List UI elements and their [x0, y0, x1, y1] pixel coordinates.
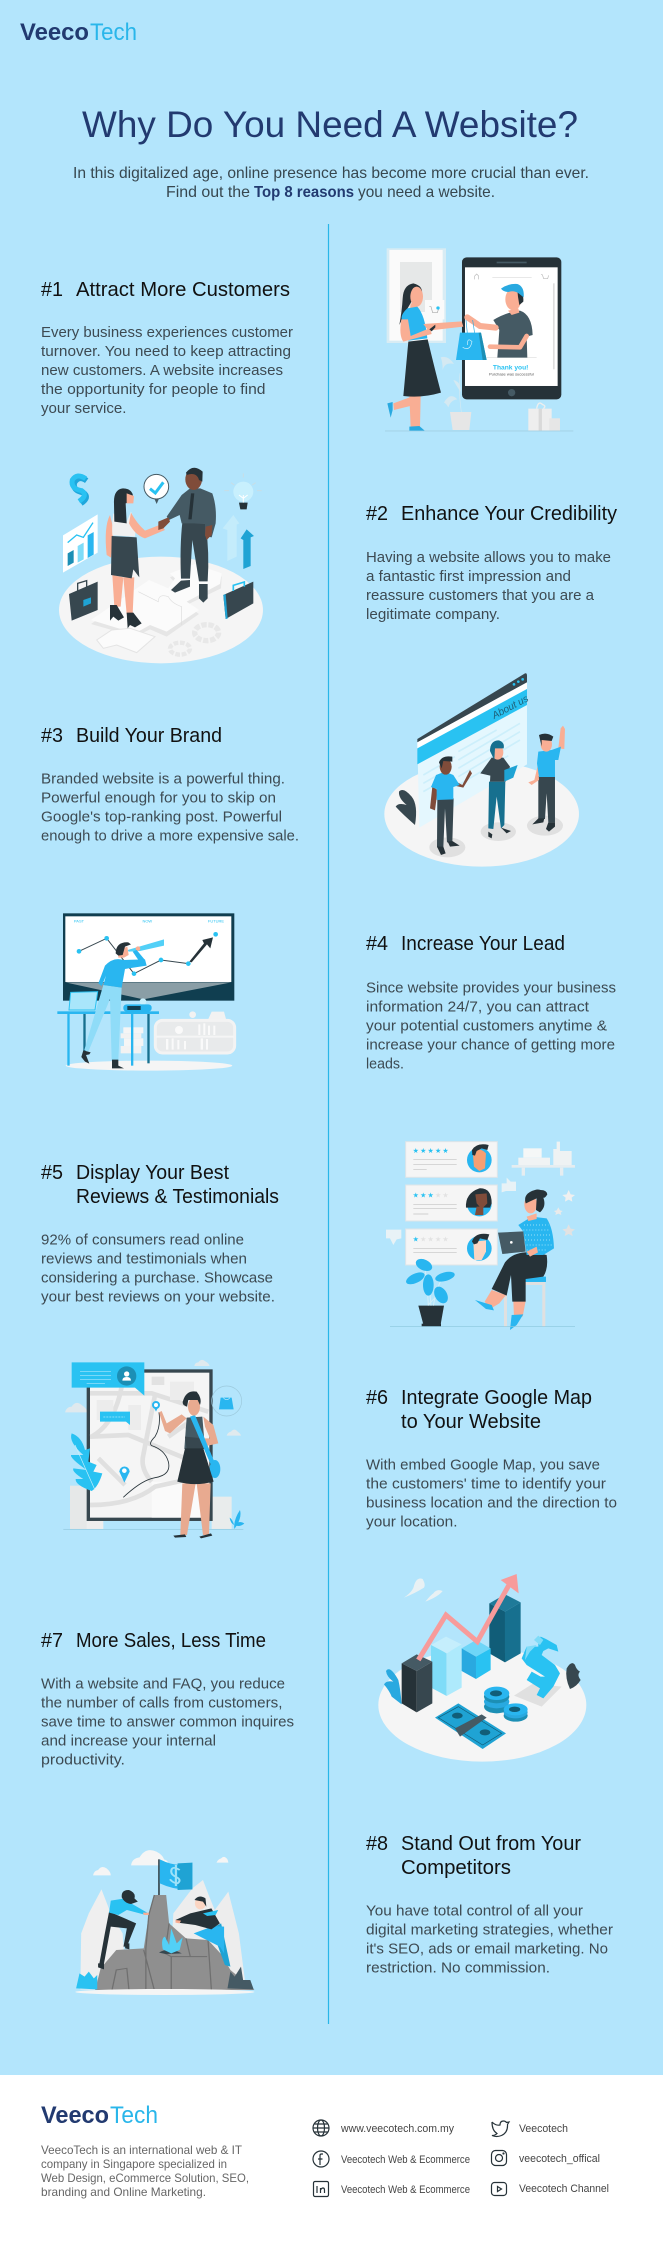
panel: reason 3 text: enough to drive a more expensive sale.: [41, 828, 299, 844]
panel: reason 8 text: it's SEO, ads or email marketing. No: [366, 1940, 608, 1958]
illustration 7: rising bar chart with money: [378, 1574, 586, 1762]
icon: instagram: [492, 2150, 506, 2166]
footer logo: [41, 2102, 158, 2129]
intro text: [73, 165, 589, 201]
panel: reason 7 text: save time to answer common inquires: [41, 1714, 294, 1730]
panel: reason 4 text: information 24/7, you can attract: [366, 998, 590, 1016]
panel: reason 4 text: Increase Your Lead: [401, 933, 565, 955]
illustration 1: woman receiving a bag from a tablet: [385, 248, 573, 431]
panel: reason 8 text: You have total control of all your: [366, 1902, 583, 1920]
logo: VeecoTech header: Tech: [90, 19, 137, 46]
icon: twitter: [492, 2121, 509, 2136]
panel: reason 4 text: [366, 933, 616, 1072]
panel: reason 7 text: and increase your internal: [41, 1732, 216, 1750]
footer logo: Veeco: [41, 2102, 109, 2129]
panel: reason 5 text: #5: [41, 1162, 63, 1184]
panel: reason 7 text: #7: [41, 1630, 63, 1652]
instagram label: veecotech_offical: [519, 2153, 600, 2165]
panel: reason 8 text: digital marketing strategies, whether: [366, 1922, 613, 1938]
illustration 3: team in front of About us page: [384, 673, 579, 867]
panel: reason 1 text: the opportunity for people to find: [41, 381, 266, 398]
illustration 4: man with telescope and trend chart: FUTURE: [208, 919, 224, 924]
panel: reason 8 text: #8: [366, 1833, 388, 1855]
panel: reason 4 text: #4: [366, 933, 388, 955]
panel: reason 1 text: your service.: [41, 400, 126, 417]
panel: reason 1 text: #1: [41, 279, 63, 301]
illustration 4: man with telescope and trend chart: [57, 913, 235, 1071]
intro text: you need a website.: [358, 184, 495, 201]
panel: reason 5 text: your best reviews on your website.: [41, 1288, 275, 1306]
panel: reason 4 text: increase your chance of getting more: [366, 1036, 615, 1054]
footer logo: Tech: [110, 2102, 158, 2129]
panel: reason 3 text: Build Your Brand: [76, 725, 222, 747]
icon: linkedin: [314, 2182, 328, 2196]
panel: reason 1 text: [41, 279, 293, 417]
icon: globe: [313, 2120, 329, 2136]
intro text: In this digitalized age, online presence has become more crucial than ever.: [73, 165, 589, 182]
illustration 3: team in front of About us page: About us: [490, 693, 531, 722]
illustration 1: woman receiving a bag from a tablet: Purchase was successful: [489, 371, 534, 376]
icon: youtube: [492, 2182, 506, 2196]
illustration 4: man with telescope and trend chart: PAST: [74, 919, 85, 924]
facebook label: Veecotech Web & Ecommerce: [341, 2154, 470, 2166]
panel: reason 4 text: Since website provides your business: [366, 980, 616, 996]
panel: reason 8 text: Competitors: [401, 1857, 511, 1879]
linkedin label: Veecotech Web & Ecommerce: [341, 2184, 470, 2196]
panel: reason 6 text: the customers' time to identify your: [366, 1476, 606, 1492]
illustration 2: handshake on puzzle platform: [59, 468, 263, 663]
panel: reason 6 text: [366, 1387, 617, 1530]
panel: reason 7 text: More Sales, Less Time: [76, 1630, 266, 1652]
panel: reason 6 text: your location.: [366, 1514, 458, 1530]
panel: reason 8 text: restriction. No commission.: [366, 1960, 550, 1976]
icon: facebook: [313, 2151, 329, 2167]
panel: reason 6 text: #6: [366, 1387, 388, 1409]
panel: reason 5 text: Display Your Best: [76, 1162, 229, 1184]
illustration 4: man with telescope and trend chart: NOW: [142, 919, 152, 924]
panel: reason 5 text: reviews and testimonials when: [41, 1250, 247, 1268]
panel: reason 4 text: leads.: [366, 1056, 404, 1072]
logo: VeecoTech header: [20, 19, 137, 46]
illustration 5: review cards and woman with laptop: ★★★★★: [413, 1191, 449, 1199]
panel: reason 2 text: Having a website allows you to make: [366, 549, 611, 566]
panel: reason 8 text: [366, 1833, 613, 1976]
panel: reason 5 text: Reviews & Testimonials: [76, 1186, 279, 1208]
illustration 8: climbers reaching a dollar flag: [75, 1850, 255, 1995]
panel: reason 1 text: new customers. A website increases: [41, 362, 283, 379]
panel: reason 2 text: Enhance Your Credibility: [401, 503, 617, 525]
panel: reason 5 text: considering a purchase. Showcase: [41, 1270, 273, 1286]
panel: reason 2 text: [366, 503, 617, 623]
panel: reason 1 text: Attract More Customers: [76, 279, 290, 301]
panel: reason 1 text: turnover. You need to keep attracting: [41, 343, 291, 360]
website label: www.veecotech.com.my: [340, 2123, 454, 2135]
panel: reason 6 text: to Your Website: [401, 1411, 541, 1433]
logo: VeecoTech header: Veeco: [20, 19, 89, 46]
illustration 6: woman pointing at a map: [63, 1360, 244, 1538]
footer company description: VeecoTech is an international web & IT: [41, 2143, 243, 2157]
panel: reason 2 text: #2: [366, 503, 388, 525]
panel: reason 3 text: Branded website is a powerful thing.: [41, 770, 285, 788]
intro text: Top 8 reasons: [254, 184, 354, 201]
panel: reason 5 text: 92% of consumers read online: [41, 1232, 244, 1248]
panel: reason 6 text: Integrate Google Map: [401, 1387, 592, 1409]
title: Why Do You Need A Website?: [82, 104, 578, 145]
panel: reason 2 text: reassure customers that you are a: [366, 587, 595, 604]
illustration 5: review cards and woman with laptop: [386, 1142, 575, 1330]
twitter label: Veecotech: [519, 2123, 568, 2135]
panel: reason 7 text: [41, 1630, 294, 1768]
panel: reason 3 text: #3: [41, 725, 63, 747]
panel: reason 5 text: [41, 1162, 279, 1306]
panel: reason 7 text: the number of calls from customers,: [41, 1694, 282, 1712]
intro text: Find out the: [166, 184, 250, 201]
panel: reason 3 text: Google's top-ranking post. Powerful: [41, 808, 282, 826]
youtube label: Veecotech Channel: [519, 2183, 609, 2195]
illustration 5: review cards and woman with laptop: ★★★★★: [413, 1147, 449, 1155]
panel: reason 3 text: Powerful enough for you to skip on: [41, 790, 276, 806]
illustration 1: woman receiving a bag from a tablet: Thank you!: [493, 364, 528, 371]
panel: reason 7 text: With a website and FAQ, you reduce: [41, 1676, 285, 1692]
panel: reason 2 text: a fantastic first impression and: [366, 568, 571, 585]
footer company description: company in Singapore specialized in: [41, 2157, 227, 2171]
footer company description: Web Design, eCommerce Solution, SEO,: [41, 2171, 249, 2185]
panel: reason 2 text: legitimate company.: [366, 606, 500, 623]
footer company description: [41, 2143, 249, 2199]
panel: reason 4 text: your potential customers anytime &: [366, 1018, 607, 1034]
panel: reason 7 text: productivity.: [41, 1752, 125, 1768]
footer company description: branding and Online Marketing.: [41, 2185, 206, 2199]
panel: reason 6 text: With embed Google Map, you save: [366, 1456, 600, 1474]
panel: reason 3 text: [41, 725, 299, 844]
illustration 5: review cards and woman with laptop: ★★★★★: [413, 1235, 449, 1243]
panel: reason 8 text: Stand Out from Your: [401, 1833, 581, 1855]
footer panel: [0, 2075, 663, 2245]
panel: reason 1 text: Every business experiences customer: [41, 324, 293, 341]
panel: reason 6 text: business location and the direction to: [366, 1494, 617, 1512]
